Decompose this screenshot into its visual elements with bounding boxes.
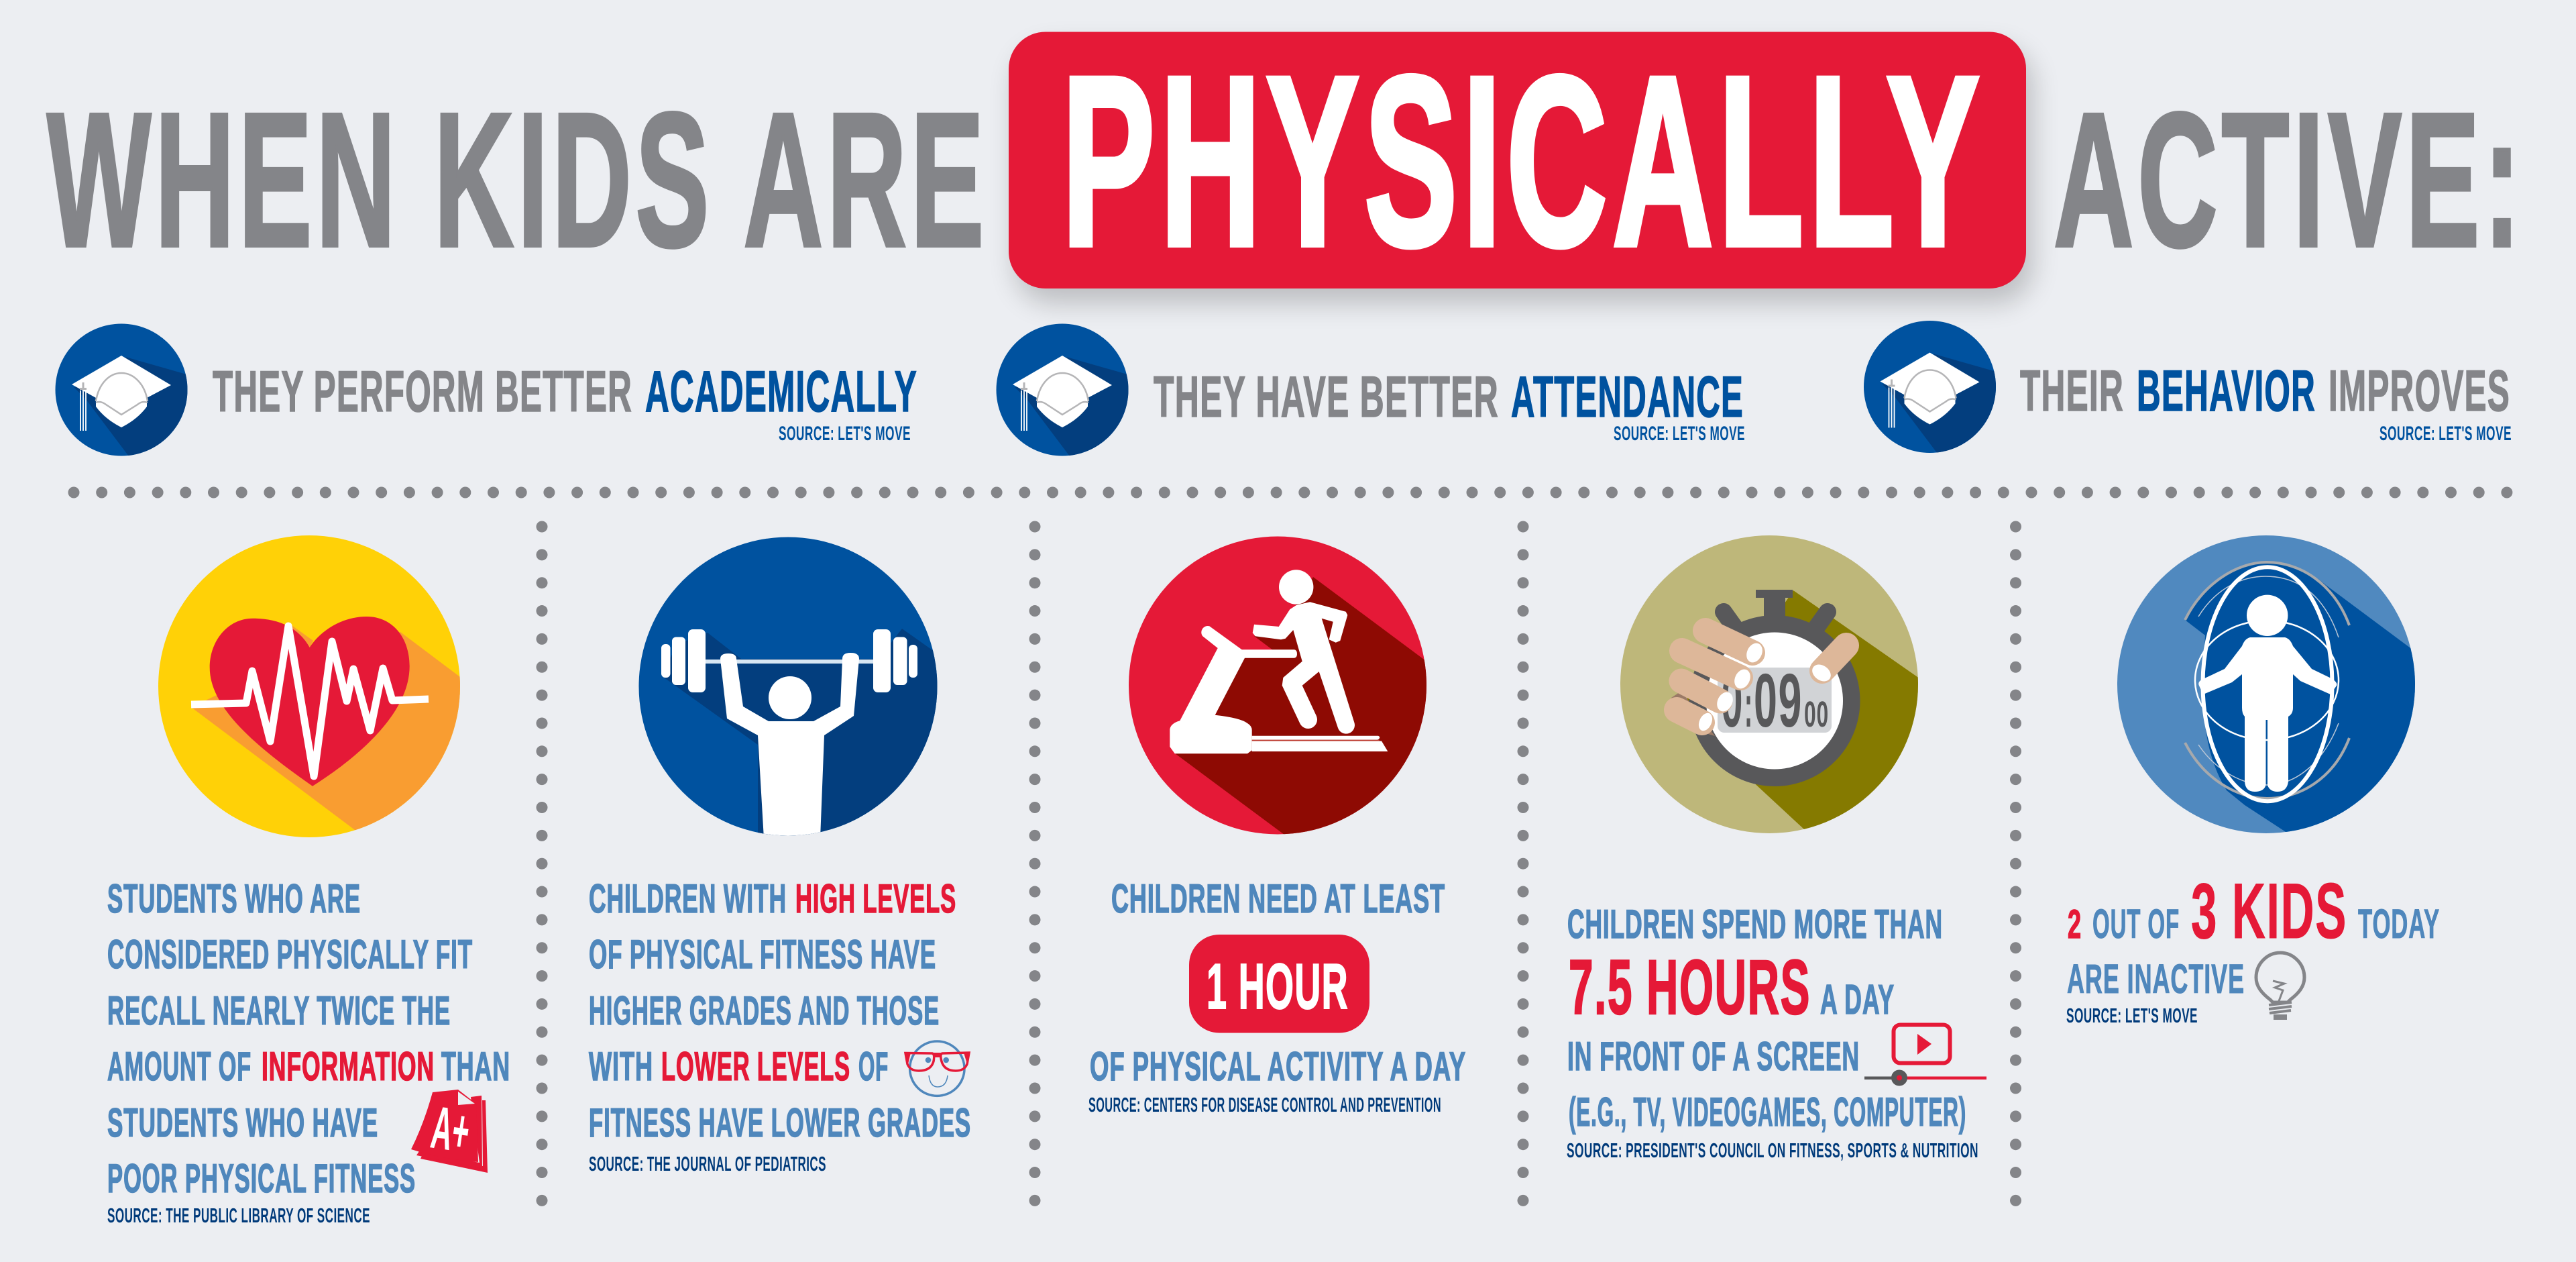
text: of physical activity: OF PHYSICAL ACTIVITY A DAY xyxy=(1090,1044,1466,1089)
text: fitness and grades: HIGH LEVELS xyxy=(795,876,956,921)
text: fitness and recall: AMOUNT OF xyxy=(107,1044,251,1089)
panel: inactive kids xyxy=(2066,535,2441,1027)
text: perform better: THEY PERFORM BETTER xyxy=(213,360,632,424)
title: when kids are: WHEN KIDS ARE xyxy=(47,74,988,287)
text: fitness and grades: HIGHER GRADES AND THOSE xyxy=(589,988,940,1033)
stat: 7.5 hours: 7.5 HOURS xyxy=(1569,945,1811,1031)
text: fitness and grades: WITH xyxy=(589,1044,653,1089)
text: have better: THEY HAVE BETTER xyxy=(1154,365,1499,429)
text: two out of three xyxy=(2067,867,2440,1002)
icon: light bulb xyxy=(2256,953,2304,1020)
text: children need: CHILDREN NEED AT LEAST xyxy=(1111,876,1445,921)
text: fitness and grades: OF xyxy=(858,1044,889,1089)
panel: memory xyxy=(107,535,508,1222)
callout: 1 hour xyxy=(1189,935,1369,1033)
text: fitness and recall: INFORMATION xyxy=(262,1044,435,1089)
source: SOURCE: LET'S MOVE xyxy=(1614,423,1745,445)
text: two out of three: ARE INACTIVE xyxy=(2067,956,2245,1002)
text: fitness and recall: RECALL NEARLY TWICE THE xyxy=(107,988,451,1033)
icon: heart with ecg xyxy=(158,535,460,837)
text: children spend: CHILDREN SPEND MORE THAN xyxy=(1567,902,1943,947)
icon: stopwatch in hand: 09 xyxy=(1754,658,1803,743)
panel: grades xyxy=(589,537,971,1175)
title xyxy=(47,25,2524,303)
text: fitness and grades xyxy=(589,876,971,1145)
icon: a-plus paper: A+ xyxy=(427,1094,474,1166)
text: academically: ACADEMICALLY xyxy=(645,360,917,424)
text: two out of three: TODAY xyxy=(2358,901,2440,947)
icon: face with glasses xyxy=(905,1041,970,1096)
icon: stopwatch in hand: 00 xyxy=(1804,694,1829,735)
text: fitness and recall: STUDENTS WHO ARE xyxy=(107,876,361,921)
benefit: attendance xyxy=(997,323,1745,463)
icon: graduation cap xyxy=(55,323,194,463)
icon: stopwatch in hand: 0 xyxy=(1721,658,1744,743)
icon: stopwatch in hand xyxy=(1620,535,1918,833)
icon: video player xyxy=(1864,1025,1986,1086)
icon: graduation cap xyxy=(997,323,1135,463)
text: fitness and recall: POOR PHYSICAL FITNESS xyxy=(107,1156,416,1201)
panel: screen time xyxy=(1567,535,1986,1162)
source: SOURCE: THE JOURNAL OF PEDIATRICS xyxy=(589,1152,826,1175)
text: fitness and recall: CONSIDERED PHYSICALLY FIT xyxy=(107,932,473,977)
icon: treadmill runner xyxy=(1129,537,1426,835)
icon: a-plus paper xyxy=(411,1090,488,1173)
text: two out of three: 2 xyxy=(2068,902,2082,947)
text: fitness and grades: CHILDREN WITH xyxy=(589,876,787,921)
source: SOURCE: CENTERS FOR DISEASE CONTROL AND PREVENTION xyxy=(1088,1093,1441,1116)
text: two out of three: 3 KIDS xyxy=(2191,867,2347,955)
benefit: behavior xyxy=(1864,321,2512,460)
text: in front of a screen: IN FRONT OF A SCREEN xyxy=(1567,1034,1860,1079)
text: fitness and recall: THAN xyxy=(441,1044,510,1089)
text: behavior: BEHAVIOR xyxy=(2137,359,2316,423)
benefit: academics xyxy=(55,323,917,463)
text: fitness and grades: FITNESS HAVE LOWER GRADES xyxy=(589,1100,971,1145)
text: fitness and grades: OF PHYSICAL FITNESS HAVE xyxy=(589,932,936,977)
source: SOURCE: LET'S MOVE xyxy=(2066,1004,2198,1027)
icon: child with hula hoop xyxy=(2117,535,2415,833)
text: fitness and recall xyxy=(107,876,510,1201)
source: SOURCE: THE PUBLIC LIBRARY OF SCIENCE xyxy=(107,1204,370,1227)
source: SOURCE: PRESIDENT'S COUNCIL ON FITNESS, SPORTS & NUTRITION xyxy=(1567,1139,1978,1162)
text: fitness and recall: STUDENTS WHO HAVE xyxy=(107,1100,378,1145)
text: examples: (E.G., TV, VIDEOGAMES, COMPUTER) xyxy=(1569,1090,1966,1135)
text: two out of three: OUT OF xyxy=(2092,901,2180,947)
source: SOURCE: LET'S MOVE xyxy=(779,423,911,445)
text: attendance: ATTENDANCE xyxy=(1511,365,1744,429)
panel: one hour xyxy=(1088,537,1475,1116)
title: red badge xyxy=(1009,25,2033,303)
icon: stopwatch in hand: : xyxy=(1744,673,1753,740)
text: a day: A DAY xyxy=(1820,977,1895,1023)
text: their: THEIR xyxy=(2020,359,2124,423)
text: fitness and grades: LOWER LEVELS xyxy=(661,1044,850,1089)
icon: graduation cap xyxy=(1864,321,2003,460)
icon: weightlifter xyxy=(638,537,952,845)
callout: 1 hour: 1 HOUR xyxy=(1207,951,1349,1022)
